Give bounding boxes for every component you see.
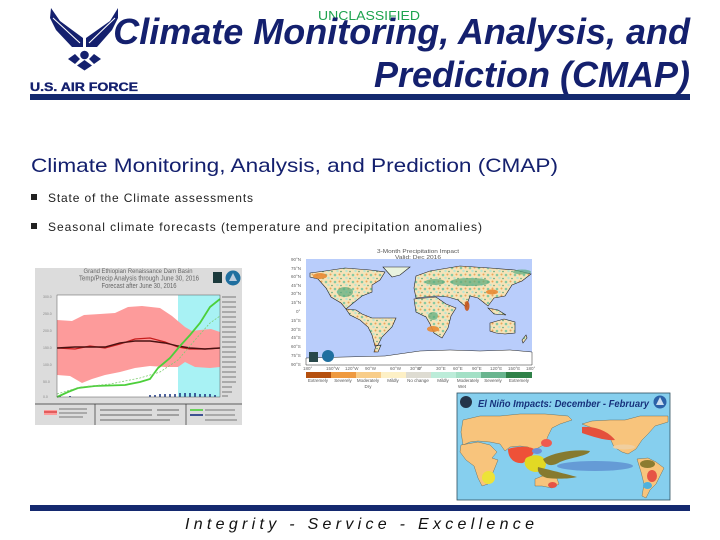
icon: panel emblems — [460, 396, 666, 408]
map axis labels: 30°N — [291, 291, 301, 296]
map colour legend: Moderately — [457, 378, 480, 383]
map axis labels: 15°S — [291, 318, 301, 323]
map axis labels: 30°E — [436, 366, 446, 371]
left axis tick labels: 150.0 — [43, 346, 52, 350]
map axis labels: 120°E — [490, 366, 502, 371]
bullet 2: Seasonal climate forecasts (temperature and precipitation anomalies) — [48, 220, 482, 234]
map axis labels: 75°S — [291, 353, 301, 358]
map axis labels: 150°W — [326, 366, 340, 371]
panel heading: El Niño Impacts: December - February — [478, 398, 650, 410]
map title — [377, 249, 460, 261]
chart title — [79, 268, 199, 290]
subheading: Climate Monitoring, Analysis, and Prediction (CMAP) — [31, 155, 558, 177]
footer rule — [30, 505, 690, 511]
left axis tick labels: 0.0 — [43, 395, 48, 399]
chart title: Temp/Precip Analysis through June 30, 2016 — [79, 276, 199, 282]
map colour legend: Wet — [458, 384, 467, 389]
map continents — [310, 266, 531, 352]
map axis labels: 150°E — [508, 366, 520, 371]
map axis labels: 60°E — [453, 366, 463, 371]
continents — [460, 414, 668, 498]
footer motto: Integrity - Service - Excellence — [185, 516, 534, 533]
map axis labels: 75°N — [291, 266, 301, 271]
map colour legend: Severely — [334, 378, 352, 383]
left axis tick labels — [43, 295, 52, 399]
chart title: Grand Ethiopian Renaissance Dam Basin — [84, 268, 193, 275]
icon: U.S. Air Force logo — [30, 8, 138, 94]
map axis labels: 0° — [296, 309, 301, 314]
map axis labels: 45°N — [291, 283, 301, 288]
map axis labels: 180° — [303, 366, 313, 371]
map axis labels: 90°S — [291, 362, 301, 367]
map colour legend: Mildly — [437, 378, 449, 383]
map colour legend: Mildly — [387, 378, 399, 383]
map axis labels: 30°S — [291, 327, 301, 332]
icon: chart emblems — [213, 270, 240, 286]
classification marking: UNCLASSIFIED — [318, 8, 420, 23]
panel: El Nino impacts map — [457, 393, 670, 500]
icon: map emblems — [309, 350, 334, 362]
map axis labels: 90°N — [291, 257, 301, 262]
plot frame — [57, 295, 220, 397]
temperature range band — [57, 306, 220, 383]
left axis tick labels: 50.0 — [43, 380, 50, 384]
map colour legend: No change — [407, 378, 429, 383]
map wet areas — [337, 270, 531, 320]
map axis labels: 30°W — [410, 366, 422, 371]
plot area — [57, 295, 220, 397]
map colour legend — [306, 372, 532, 389]
map colour legend: Severely — [484, 378, 502, 383]
panel: basin temperature and precipitation chart — [35, 268, 242, 425]
panel: 3-month precipitation impact map — [291, 249, 536, 389]
map title: 3-Month Precipitation Impact — [377, 249, 460, 255]
chart title: Forecast after June 30, 2016 — [102, 283, 177, 290]
map dry areas — [313, 273, 498, 332]
precipitation bars — [60, 393, 215, 397]
map colour legend: Dry — [364, 384, 372, 389]
icon: wings — [50, 8, 118, 70]
right axis tick labels — [222, 297, 236, 396]
left axis tick labels: 300.0 — [43, 295, 52, 299]
temperature lines — [57, 338, 220, 349]
left axis tick labels: 250.0 — [43, 312, 52, 316]
map colour legend: Moderately — [357, 378, 380, 383]
map axis labels: 0° — [418, 366, 423, 371]
bullet list — [31, 191, 482, 234]
bullet 1: State of the Climate assessments — [48, 191, 253, 205]
left axis tick labels: 100.0 — [43, 363, 52, 367]
cumulative precipitation lines — [57, 299, 220, 397]
map axis labels — [291, 257, 536, 371]
header rule — [30, 94, 690, 100]
map colour legend: Extremely — [509, 378, 530, 383]
map axis labels: 60°S — [291, 344, 301, 349]
legend strip — [35, 404, 242, 425]
map axis labels: 60°W — [390, 366, 402, 371]
map axis labels: 180° — [526, 366, 536, 371]
title: Prediction (CMAP) — [374, 54, 690, 95]
map Antarctica — [306, 350, 532, 365]
map title: Valid: Dec 2016 — [395, 255, 441, 261]
logo wordmark: U.S. AIR FORCE — [30, 82, 138, 94]
map axis labels: 90°E — [472, 366, 482, 371]
impact zones — [482, 427, 657, 489]
left axis tick labels: 200.0 — [43, 329, 52, 333]
map colour legend: Extremely — [308, 378, 329, 383]
map axis labels: 60°N — [291, 274, 301, 279]
map axis labels: 120°W — [345, 366, 359, 371]
map axis labels: 45°S — [291, 335, 301, 340]
map ocean — [306, 259, 532, 365]
map axis labels: 15°N — [291, 300, 301, 305]
title — [113, 11, 691, 95]
map axis labels: 90°W — [365, 366, 377, 371]
title: Climate Monitoring, Analysis, and — [113, 11, 691, 52]
